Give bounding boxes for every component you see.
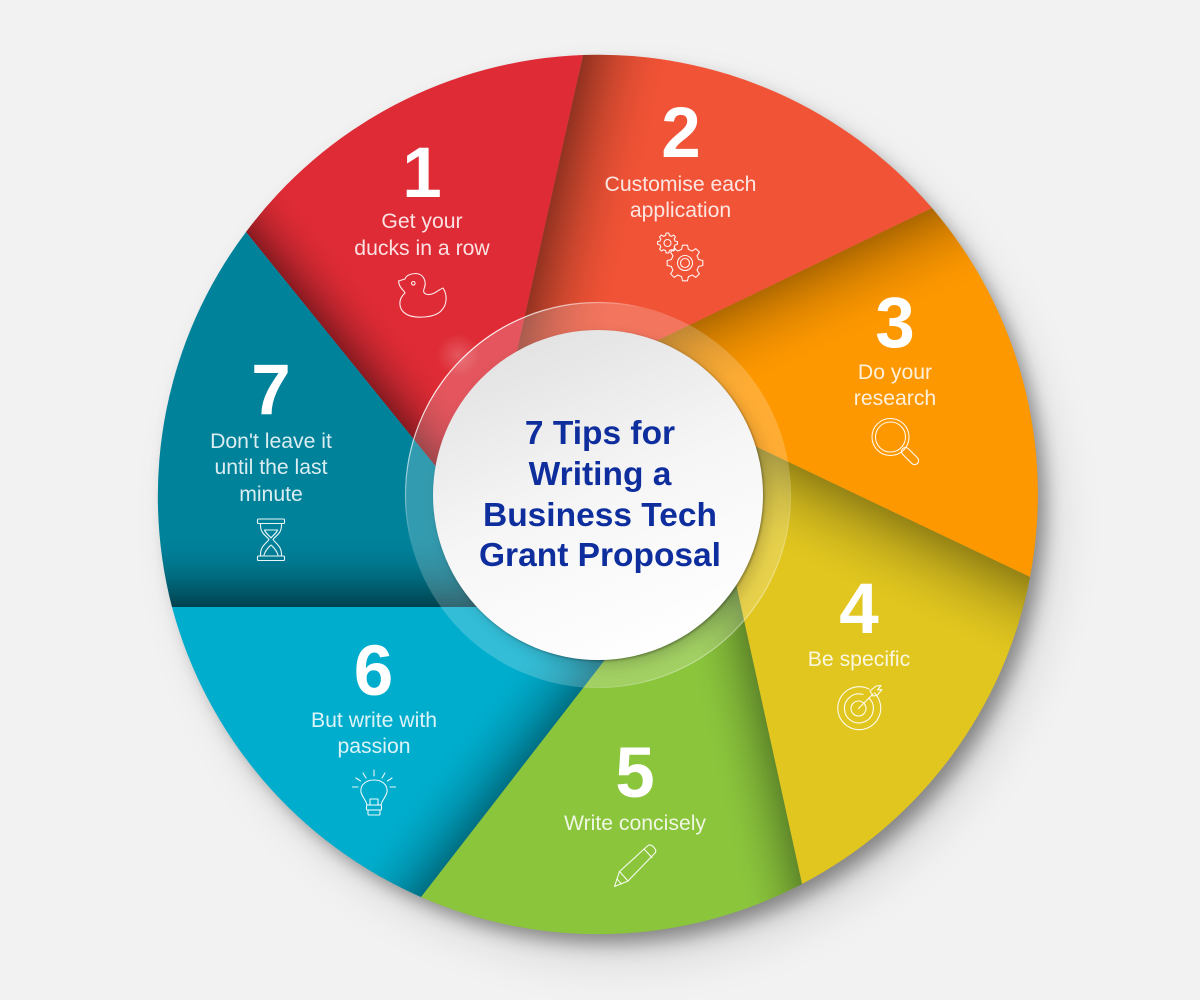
segment 5: write concisely	[421, 495, 802, 934]
segment 2: customise each application: Customise each	[605, 173, 756, 196]
segment 6: but write with passion: passion	[337, 735, 411, 758]
segment 2: customise each application: application	[630, 199, 731, 222]
segment 4: be specific: 4	[839, 570, 879, 649]
title	[479, 415, 721, 574]
segment 7: don't leave it until the last minute	[158, 232, 598, 607]
segment 1: get your ducks in a row: 1	[402, 134, 442, 213]
segment 2: customise each application	[514, 55, 932, 495]
segment 5: write concisely: 5	[615, 734, 655, 813]
disk drop shadow	[169, 67, 1050, 954]
segment 3: do your research	[598, 208, 1038, 577]
segment 7: don't leave it until the last minute: minute	[239, 483, 303, 506]
glass ring	[405, 302, 791, 688]
title: Writing a	[529, 456, 672, 493]
segment 7: don't leave it until the last minute: Don't leave it	[210, 430, 332, 453]
segment 6: but write with passion	[172, 495, 614, 897]
centre disc	[433, 330, 763, 660]
segment 5: write concisely: Write concisely	[564, 812, 706, 835]
segment 1: get your ducks in a row: ducks in a row	[354, 237, 490, 260]
segment 3: do your research: research	[854, 387, 936, 410]
segment 1: get your ducks in a row: Get your	[381, 210, 463, 233]
segment 4: be specific: Be specific	[808, 648, 911, 671]
segment 3: do your research: Do your	[858, 361, 932, 384]
title: Grant Proposal	[479, 537, 721, 574]
title: 7 Tips for	[525, 415, 675, 452]
segment 3: do your research: 3	[875, 284, 915, 363]
segment 7: don't leave it until the last minute: 7	[251, 351, 291, 430]
title: Business Tech	[483, 497, 717, 534]
segment 6: but write with passion: 6	[354, 632, 393, 711]
segment 4: be specific	[598, 441, 1030, 884]
segment 2: customise each application: 2	[661, 94, 701, 173]
segment 1: get your ducks in a row	[246, 55, 598, 495]
segment 6: but write with passion: But write with	[311, 709, 437, 732]
centre disc shadow	[434, 331, 769, 666]
segment 7: don't leave it until the last minute: until the last	[214, 456, 328, 479]
